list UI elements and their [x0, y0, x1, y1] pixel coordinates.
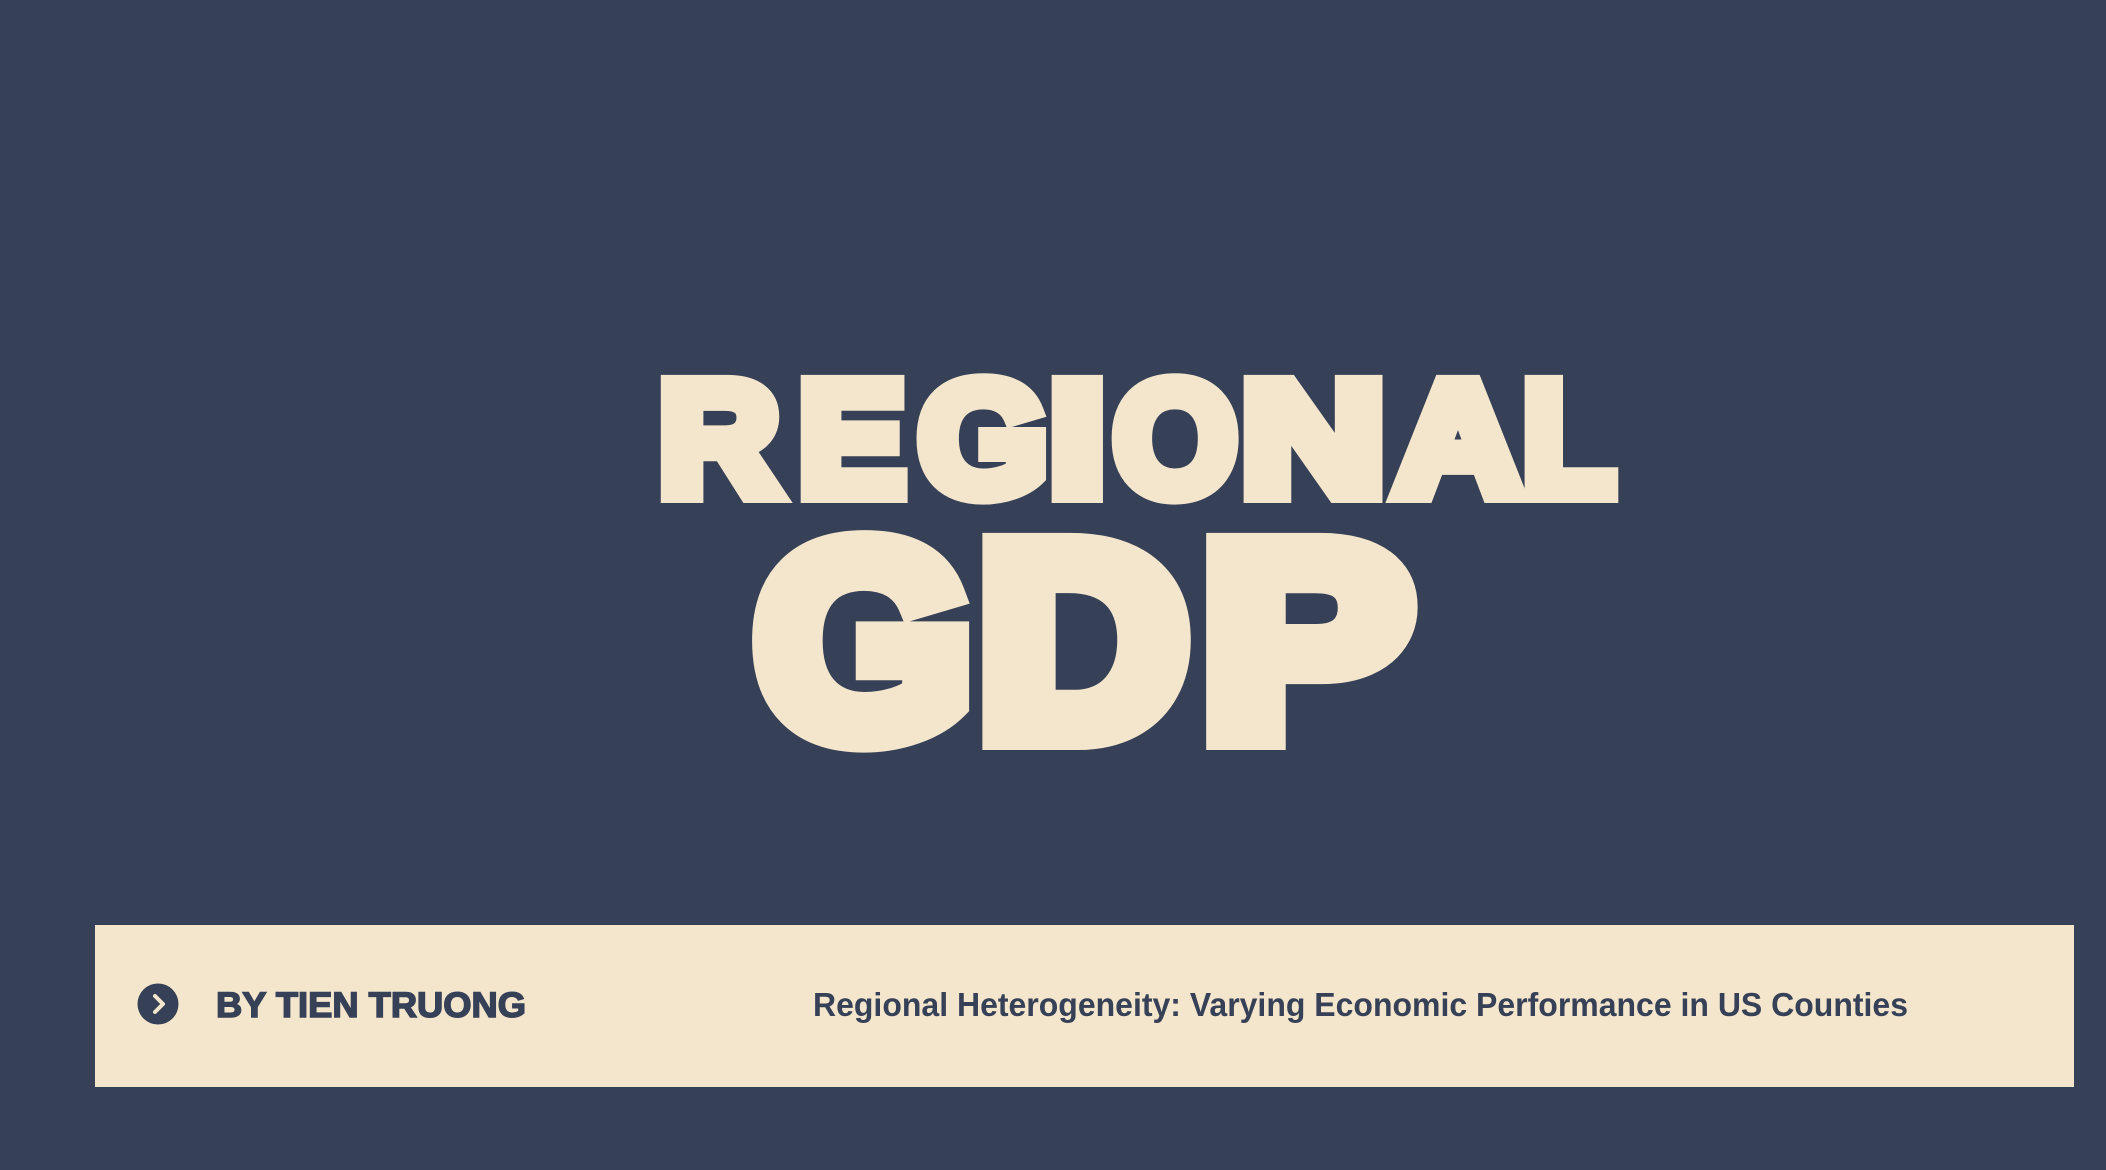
title: GDP: D [979, 489, 1187, 793]
title: GDP: G [756, 489, 971, 793]
title: GDP: P [1202, 489, 1411, 793]
title: REGIONAL: E [799, 349, 905, 528]
icon: chevron in circle [138, 984, 178, 1024]
title: REGIONAL: R [659, 349, 779, 528]
title: REGIONAL: L [1523, 349, 1614, 528]
title: REGIONAL: G [919, 349, 1047, 528]
title: REGIONAL: N [1242, 349, 1385, 528]
title: REGIONAL: A [1395, 349, 1521, 528]
author byline: BY TIEN TRUONG [216, 986, 526, 1025]
subtitle: Regional Heterogeneity: Varying Economic Performance in US Counties [813, 986, 1908, 1023]
title: REGIONAL: O [1114, 349, 1236, 528]
title: REGIONAL: I [1050, 349, 1105, 528]
panel: footer banner [95, 925, 2074, 1087]
